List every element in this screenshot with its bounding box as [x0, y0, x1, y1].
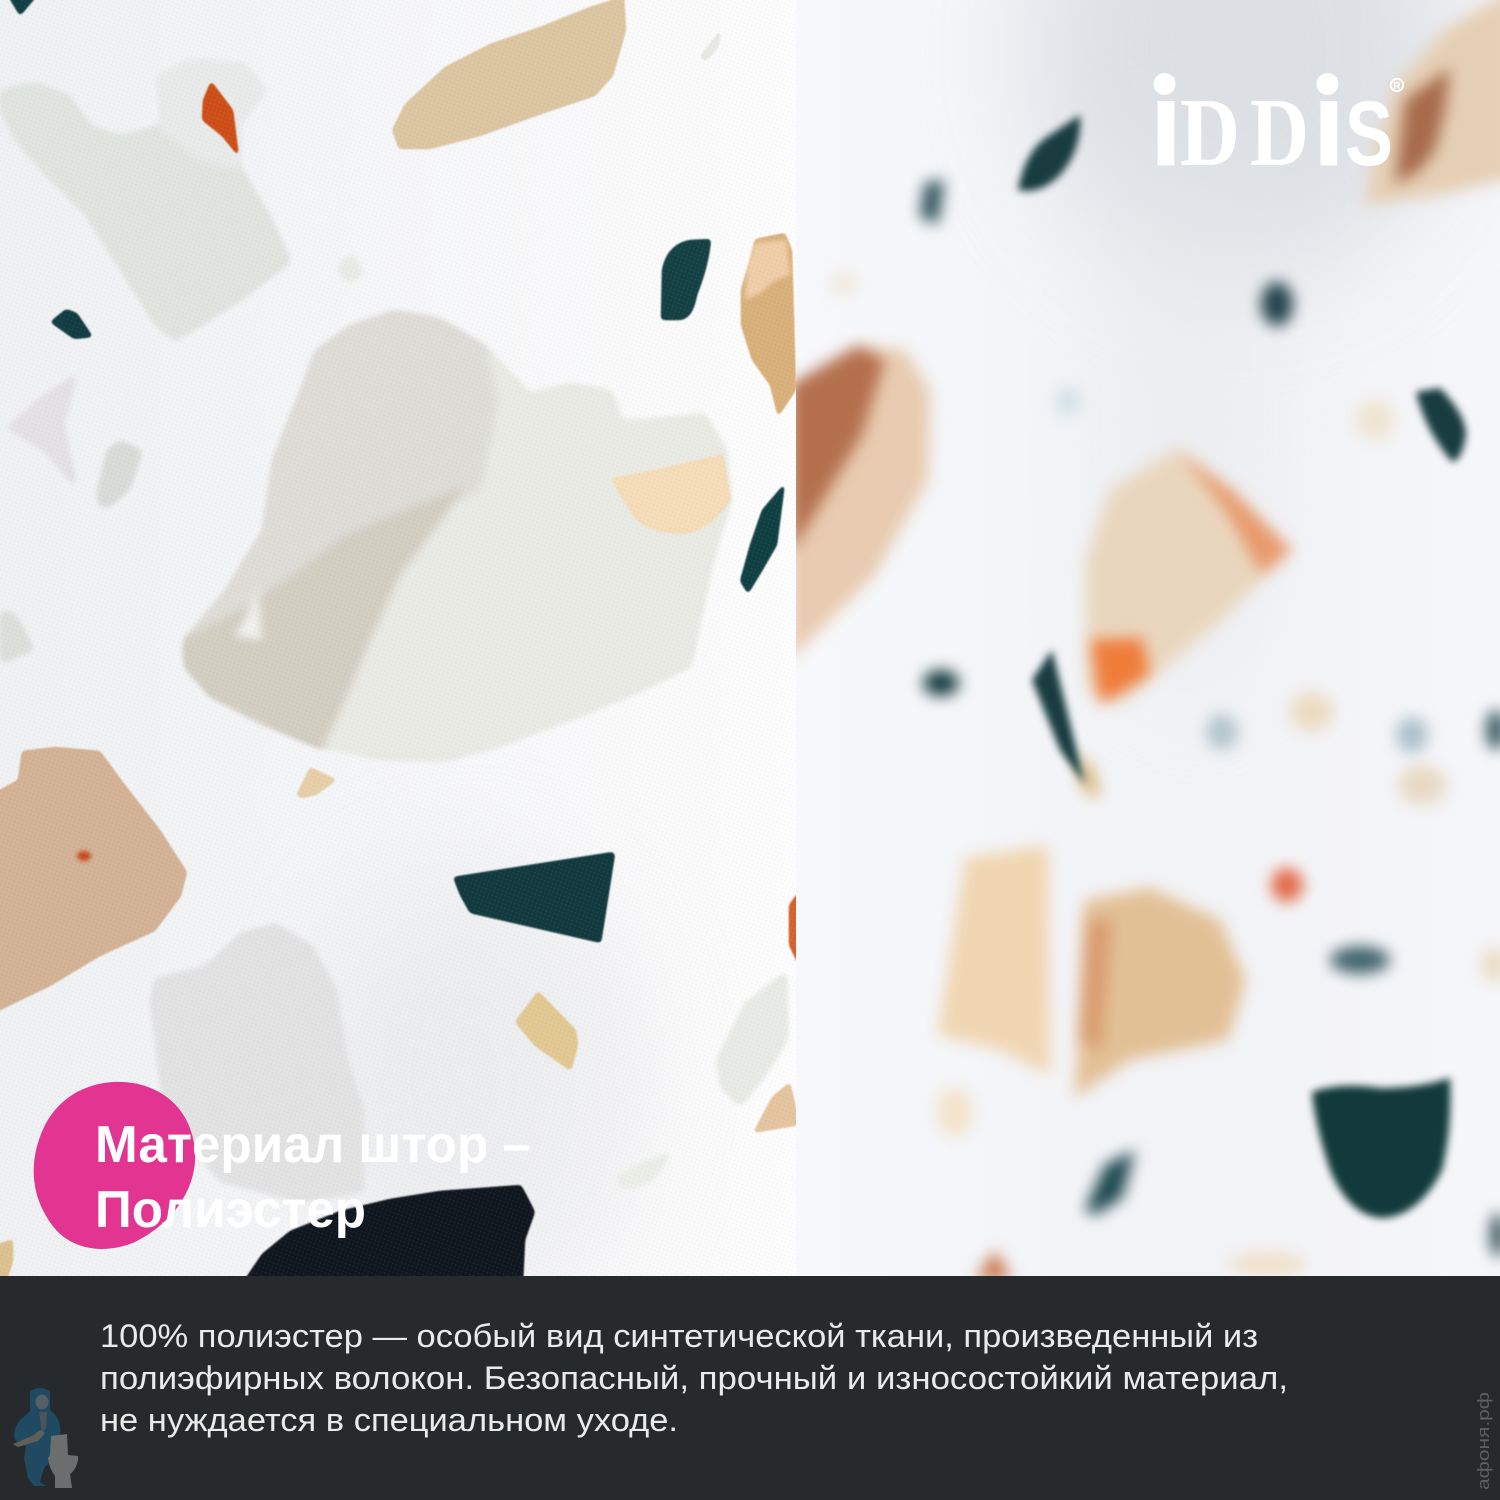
blurred chip: teal sliver [1032, 650, 1085, 785]
terrazzo chip: paler upper part [157, 59, 265, 164]
plumber body [14, 1388, 60, 1486]
blurred chip: cream dot [1355, 400, 1395, 440]
terrazzo chip: teal rounded [661, 239, 711, 320]
blurred chip: center orange [1090, 638, 1150, 705]
terrazzo chip: tan right [741, 233, 796, 417]
blurred chip: small teal [920, 180, 944, 224]
blurred chip: center orange edge [1180, 452, 1292, 575]
blurred chip: teal right [1416, 388, 1466, 462]
blurred chip: tan right bottom [1075, 888, 1246, 1098]
blurred chip: darker strip [1078, 920, 1112, 1050]
blurred soft tan chips [790, 0, 1500, 1280]
terrazzo chip: small teal [50, 309, 93, 339]
blurred chip: tan dot lower [1398, 765, 1446, 805]
blurred chip: top right brown [1395, 68, 1450, 185]
blurred chip: center tan [1086, 448, 1292, 705]
terrazzo chip: top-left teal [9, 0, 35, 16]
terrazzo chip: white nick [234, 588, 262, 640]
terrazzo chip: dark wedge [453, 852, 615, 943]
terrazzo chip: warm grey wedge [183, 485, 467, 750]
description text: полиэфирных волокон. Безопасный, прочный и износостойкий материал, [100, 1360, 1288, 1396]
logo: iDDiS [1149, 55, 1403, 191]
blurred chip: tan dot [1290, 692, 1334, 732]
watermark: афоня.рф [1474, 1392, 1493, 1490]
description text: 100% полиэстер — особый вид синтетической ткани, произведенный из [100, 1318, 1258, 1354]
heading: Материал штор – [95, 1116, 531, 1174]
plumber shirt [39, 1412, 47, 1433]
terrazzo chip: top tan [392, 0, 626, 149]
terrazzo chip: large pale body [254, 347, 733, 763]
toilet [48, 1434, 78, 1488]
blurred chip: teal dash [1330, 946, 1390, 974]
terrazzo chip: bottom-left tan [0, 1239, 13, 1282]
blurred chip: left brown [790, 345, 885, 555]
blurred chip: teal oval [923, 670, 959, 696]
blurred chip: pale tan dot [937, 1088, 973, 1136]
terrazzo chip: darker grey top [192, 310, 496, 632]
blurred chip: left tan [790, 345, 930, 660]
logo registered mark: R [1393, 81, 1401, 92]
blurred dark chips [1018, 115, 1466, 1218]
blurred chip: bottom dark [1312, 1078, 1450, 1218]
blurred chip: bottom orange [975, 1250, 1012, 1280]
logo wordmark: i [1149, 55, 1183, 191]
blurred chip: tan left bottom [938, 845, 1050, 1075]
blurred chip: blue dot right [1396, 717, 1428, 753]
logo wordmark: D [1180, 79, 1240, 186]
terrazzo chip: pale green right [716, 970, 788, 1107]
terrazzo chip: tan right bottom [753, 1082, 800, 1133]
blurred chip: teal leaf [1018, 115, 1080, 191]
panel: sharp fabric close-up [0, 0, 800, 1300]
logo wordmark: D [1250, 79, 1309, 186]
terrazzo chip: teal sliver [740, 483, 785, 594]
terrazzo chip: faint lower [618, 1154, 668, 1189]
logo registered mark [1391, 79, 1403, 92]
terrazzo chip: faint speck [700, 28, 722, 62]
description text: не нуждается в специальном уходе. [100, 1402, 678, 1438]
terrazzo chip: orange edge [789, 890, 800, 968]
terrazzo chip: black [243, 1185, 535, 1282]
pink blob behind heading [34, 1082, 195, 1249]
logo wordmark [1149, 55, 1393, 191]
terrazzo chip: peach [611, 454, 731, 534]
sharp terrazzo chips [0, 0, 800, 1282]
terrazzo chip: red dot [77, 851, 91, 861]
plumber face [36, 1394, 48, 1410]
terrazzo chip: small grey [97, 440, 143, 507]
terrazzo chip: peach overlay [745, 240, 790, 300]
blurred chip: pale blue dot [1056, 388, 1080, 416]
footer bar [0, 1276, 1500, 1500]
description text [100, 1318, 1288, 1438]
terrazzo chip: tan diamond [515, 991, 578, 1071]
terrazzo chip: pale grey-green [0, 82, 292, 342]
logo wordmark: S [1345, 83, 1393, 185]
terrazzo chip: orange [202, 81, 239, 157]
blurred chip: teal small bottom [1085, 1150, 1135, 1215]
blurred chip: red dot [1271, 868, 1303, 902]
blurred chip: edge tan [1482, 947, 1500, 983]
terrazzo chip: grey blob [150, 923, 364, 1202]
icon: plumber with toilet [13, 1388, 78, 1488]
blurred chip: tail [1075, 750, 1100, 800]
blurred chip: edge teal [1486, 710, 1500, 750]
blurred chip: top right tan [1365, 0, 1500, 205]
heading: Полиэстер [95, 1181, 366, 1239]
panel: blurred fabric background [790, 0, 1500, 1280]
logo wordmark: i [1312, 55, 1346, 191]
blurred chip: cream speck [830, 272, 858, 296]
terrazzo chip: small tan [296, 767, 337, 798]
blurred chip: bottom pale tan [1230, 1252, 1306, 1276]
terrazzo chip: lavender [10, 378, 75, 482]
blurred chip: edge dark [1490, 1213, 1500, 1257]
terrazzo chip: large tan left [0, 747, 187, 1012]
terrazzo chip: pale speck [338, 256, 362, 282]
blurred chip: blue dot [1206, 714, 1238, 750]
heading [95, 1116, 531, 1239]
plumber wrench [13, 1430, 45, 1447]
blurred chip: teal dot [1261, 282, 1293, 326]
terrazzo chip: left edge grey [0, 610, 35, 664]
pale terrazzo chips [0, 58, 788, 1202]
